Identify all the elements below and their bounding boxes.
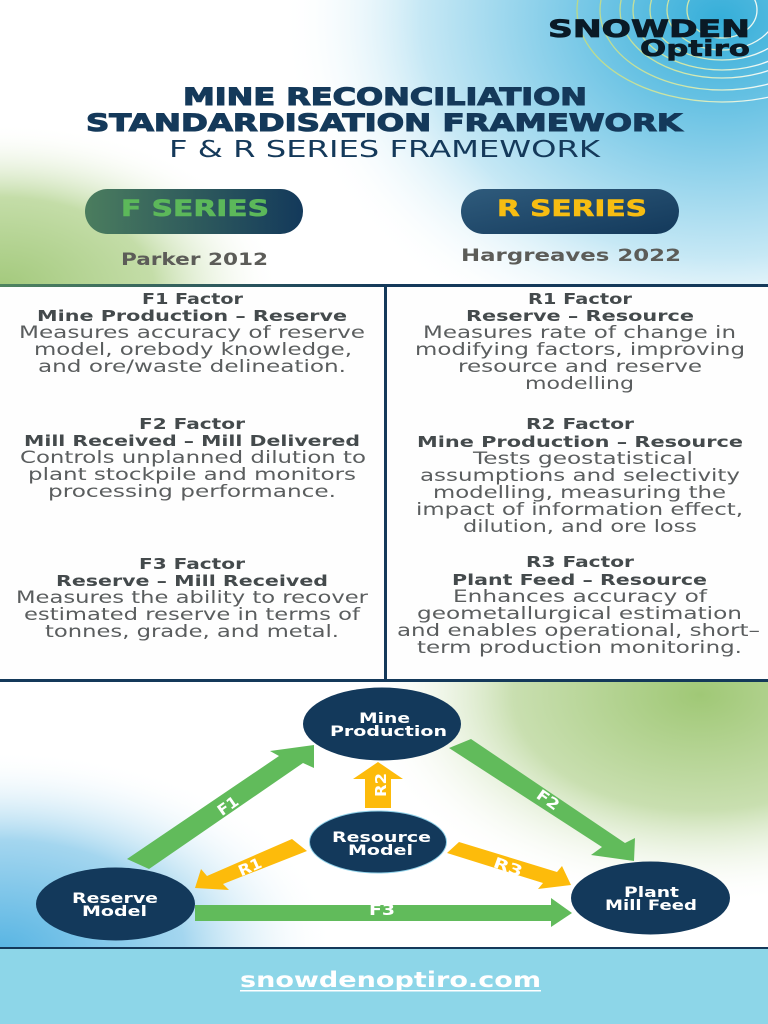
arrow: F3: F3 xyxy=(369,901,395,919)
node: Mine Production xyxy=(303,688,461,760)
panel: F series factors xyxy=(16,290,368,641)
title xyxy=(86,83,684,163)
R2 factor: Tests geostatistical xyxy=(472,449,693,468)
F series pill: F SERIES xyxy=(121,197,269,222)
R1 factor: R1 Factor xyxy=(528,290,632,308)
F3 factor: F3 Factor xyxy=(139,555,245,573)
R1 factor: Reserve – Resource xyxy=(466,307,694,325)
website link: snowdenoptiro.com xyxy=(240,968,541,992)
R3 factor xyxy=(397,553,760,657)
arrow: R3 xyxy=(447,842,571,889)
R2 factor: R2 Factor xyxy=(526,415,634,433)
R1 factor xyxy=(415,290,745,393)
F series pill xyxy=(85,189,303,234)
node: Plant Mill Feed xyxy=(571,862,730,934)
R3 factor: and enables operational, short– xyxy=(397,621,760,640)
R1 factor: modelling xyxy=(525,374,634,393)
F2 factor: Mill Received – Mill Delivered xyxy=(24,432,360,450)
node: Plant Mill Feed: Plant xyxy=(624,885,679,901)
F2 factor: F2 Factor xyxy=(139,415,245,433)
F3 factor: Measures the ability to recover xyxy=(16,588,368,607)
title: STANDARDISATION FRAMEWORK xyxy=(86,109,684,137)
F series author: Parker 2012 xyxy=(121,250,268,270)
arrow: F1: F1 xyxy=(214,792,242,820)
header background xyxy=(0,0,768,285)
arrow: F1 xyxy=(127,745,314,869)
arrow: R2: R2 xyxy=(372,773,390,797)
R2 factor xyxy=(416,415,743,536)
R1 factor: resource and reserve xyxy=(458,357,702,376)
footer xyxy=(0,949,768,1024)
node: Reserve Model xyxy=(36,868,195,940)
arrow: R1: R1 xyxy=(235,854,265,880)
R2 factor: modelling, measuring the xyxy=(433,483,726,502)
R3 factor: R3 Factor xyxy=(526,553,634,571)
R3 factor: geometallurgical estimation xyxy=(417,604,742,623)
logo xyxy=(548,15,750,62)
R2 factor: impact of information effect, xyxy=(416,500,743,519)
F2 factor: Controls unplanned dilution to xyxy=(20,448,366,467)
title: MINE RECONCILIATION xyxy=(183,83,587,111)
arrow: R1 xyxy=(195,839,307,890)
R series author: Hargreaves 2022 xyxy=(461,246,681,266)
R3 factor: term production monitoring. xyxy=(417,638,742,657)
F1 factor: F1 Factor xyxy=(142,290,243,308)
F1 factor: and ore/waste delineation. xyxy=(38,357,346,376)
node: Mine Production: Production xyxy=(330,724,447,740)
F3 factor: estimated reserve in terms of xyxy=(24,605,362,624)
node: Resource Model xyxy=(310,811,446,873)
R series pill xyxy=(461,189,679,234)
F3 factor xyxy=(16,555,368,641)
F1 factor: Mine Production – Reserve xyxy=(37,307,347,325)
F1 factor xyxy=(19,290,365,376)
logo: SNOWDEN xyxy=(548,15,750,43)
panel: R series factors xyxy=(397,290,760,657)
node: Resource Model: Resource xyxy=(332,830,431,846)
arrow: F2: F2 xyxy=(533,786,563,814)
node: Mine Production: Mine xyxy=(359,711,410,727)
title: F & R SERIES FRAMEWORK xyxy=(169,137,601,163)
R2 factor: assumptions and selectivity xyxy=(420,466,740,485)
arrow: F2 xyxy=(449,739,635,861)
node: Plant Mill Feed: Mill Feed xyxy=(605,898,697,914)
R3 factor: Plant Feed – Resource xyxy=(452,571,707,589)
R2 factor: dilution, and ore loss xyxy=(463,517,697,536)
arrow: F3 xyxy=(195,898,572,927)
F3 factor: Reserve – Mill Received xyxy=(56,572,328,590)
arrow: R2 xyxy=(353,762,403,808)
F1 factor: model, orebody knowledge, xyxy=(34,340,352,359)
logo: Optiro xyxy=(640,37,750,62)
arrow: R3: R3 xyxy=(491,853,525,881)
F2 factor: processing performance. xyxy=(48,482,336,501)
F2 factor: plant stockpile and monitors xyxy=(28,465,356,484)
F2 factor xyxy=(20,415,366,501)
F1 factor: Measures accuracy of reserve xyxy=(19,323,365,342)
panel: factor tables background xyxy=(0,285,768,680)
R3 factor: Enhances accuracy of xyxy=(453,587,709,606)
node: Reserve Model: Model xyxy=(82,904,147,920)
R series pill: R SERIES xyxy=(497,197,647,222)
R1 factor: Measures rate of change in xyxy=(423,323,736,342)
panel: reconciliation diagram xyxy=(0,682,768,947)
F3 factor: tonnes, grade, and metal. xyxy=(45,622,339,641)
node: Resource Model: Model xyxy=(348,843,413,859)
R1 factor: modifying factors, improving xyxy=(415,340,745,359)
R2 factor: Mine Production – Resource xyxy=(417,433,743,451)
logo rings xyxy=(577,0,768,102)
node: Reserve Model: Reserve xyxy=(72,891,158,907)
